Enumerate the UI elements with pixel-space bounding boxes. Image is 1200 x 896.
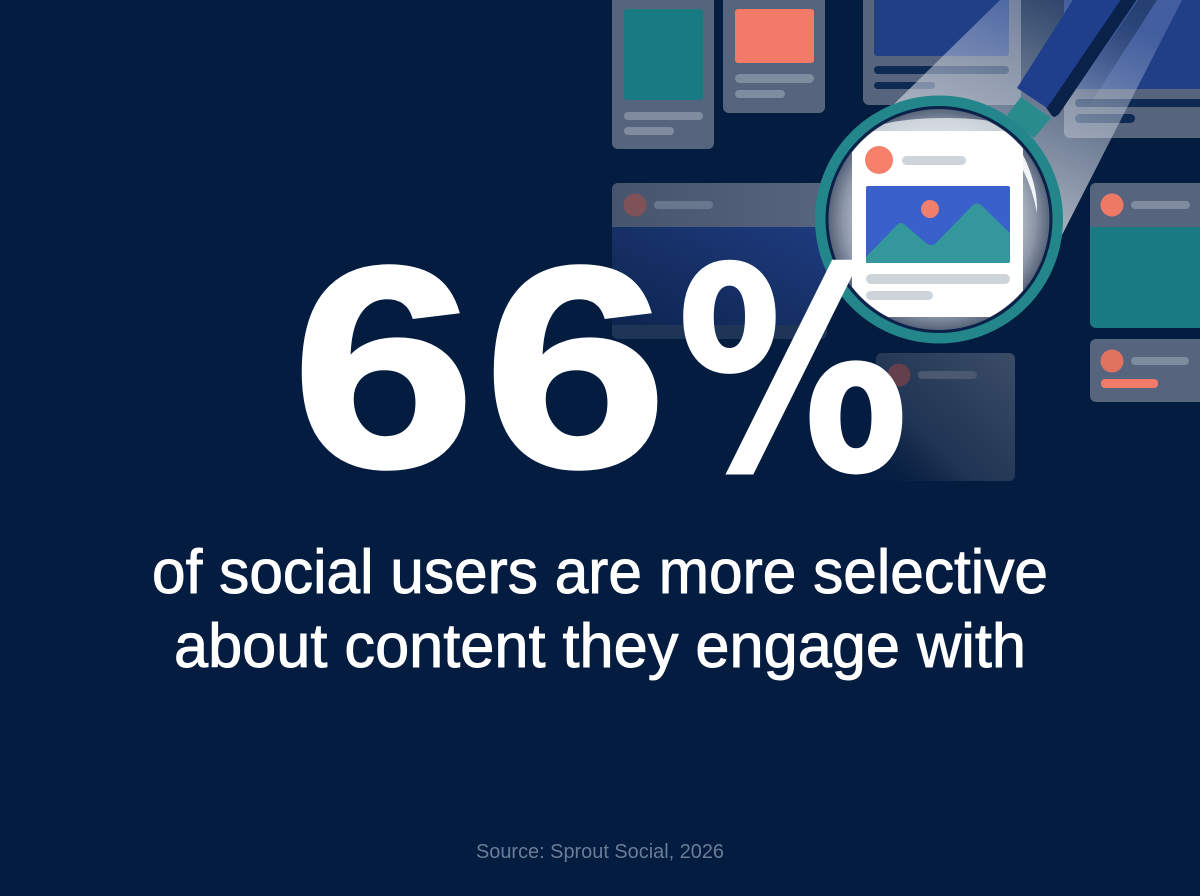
post card [852, 131, 1023, 317]
card: top right post [1064, 0, 1200, 138]
magnifier rim [820, 101, 1058, 338]
post avatar [865, 146, 893, 174]
post text line short [866, 291, 933, 300]
big number [292, 208, 908, 536]
post title line [902, 156, 966, 165]
subtitle: of social users are more selective [152, 538, 1048, 607]
subtitle: about content they engage with [174, 612, 1026, 681]
image sun [921, 200, 939, 218]
icon: magnifying glass [820, 0, 1140, 338]
subtitle [152, 538, 1048, 681]
magnifier handle dark edge [1045, 0, 1140, 117]
lens glare [1023, 155, 1037, 213]
magnified post [852, 118, 1037, 317]
card: wide blue post behind number [612, 183, 827, 339]
card: coral post [723, 0, 825, 113]
post image [866, 186, 1010, 263]
card: right teal post [1090, 183, 1200, 328]
card: right small post [1090, 339, 1200, 402]
card: tall teal post [612, 0, 714, 149]
big number: 6 [292, 208, 475, 527]
magnifier light beam [890, 0, 1182, 237]
top lens highlight [873, 118, 1011, 136]
card: faded lower post [876, 353, 1015, 481]
card: top blue post [863, 0, 1021, 105]
post text line long [866, 274, 1010, 284]
panel: background feed cards [612, 0, 1200, 481]
image mountains [866, 204, 1010, 263]
source: Source: Sprout Social, 2026 [476, 841, 724, 863]
big number: 6 [484, 208, 667, 527]
big number: % [677, 209, 908, 536]
magnifier handle [1017, 0, 1124, 108]
magnifier handle neck [1007, 97, 1051, 138]
